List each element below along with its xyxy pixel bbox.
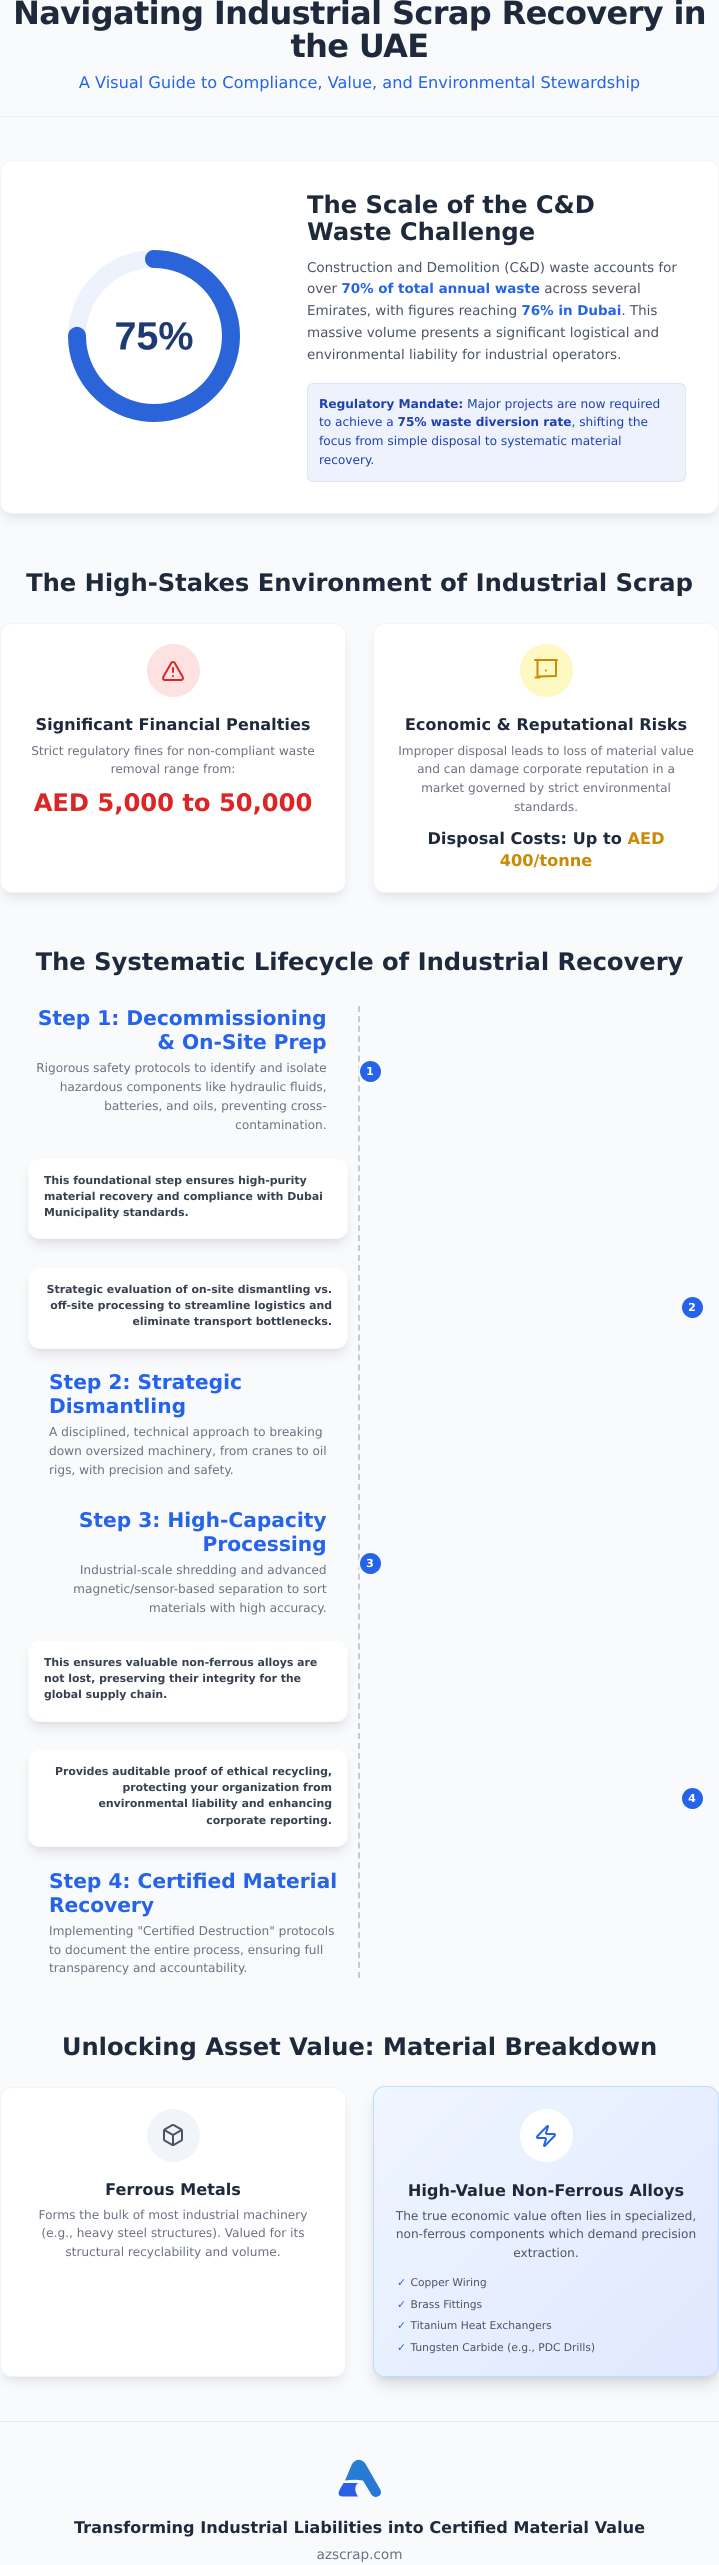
- step 1 text: & On-Site Prep: [157, 1030, 327, 1054]
- card text: extraction.: [513, 2246, 579, 2260]
- section heading: systematic lifecycle: The Systematic Lifecycle of Industrial Recovery: [36, 948, 683, 976]
- card text: market governed by strict environmental: [421, 781, 671, 795]
- step 4 note: [28, 1749, 348, 1847]
- card text: Improper disposal leads to loss of material value: [398, 744, 694, 758]
- card text: [396, 2208, 696, 2260]
- card text: and can damage corporate reputation in a: [417, 762, 675, 776]
- step 3 note: This ensures valuable non-ferrous alloys are: [44, 1656, 317, 1669]
- callout: regulatory mandate: focus from simple disposal to systematic material: [319, 434, 622, 448]
- step 4 text: [49, 1868, 337, 1975]
- step 2 note: off-site processing to streamline logistics and: [50, 1299, 332, 1312]
- panel body text: [307, 260, 677, 363]
- step 2 note: Strategic evaluation of on-site dismantling vs.: [47, 1283, 332, 1296]
- step 2 text: down oversized machinery, from cranes to oil: [49, 1444, 327, 1458]
- step 4 note: environmental liability and enhancing: [99, 1797, 332, 1810]
- card text: non-ferrous components which demand precision: [396, 2227, 696, 2241]
- title: [13, 0, 706, 65]
- panel body text: Emirates, with figures reaching 76% in Dubai. This: [307, 303, 657, 319]
- step 2 text: [49, 1370, 327, 1477]
- panel: ferrous metals: [0, 2087, 346, 2377]
- list of alloys: ✓: [397, 2276, 406, 2289]
- step 3 text: Industrial-scale shredding and advanced: [80, 1563, 327, 1577]
- step 4 note: protecting your organization from: [122, 1781, 332, 1794]
- step 3 note: [28, 1640, 348, 1722]
- step 4 badge: [682, 1788, 702, 1808]
- step 2 text: A disciplined, technical approach to breaking: [49, 1425, 323, 1439]
- list of alloys: Copper Wiring: [410, 2276, 487, 2289]
- step 3 text: Step 3: High-Capacity: [79, 1508, 327, 1532]
- card text: The true economic value often lies in specialized,: [396, 2208, 696, 2222]
- step 1 text: hazardous components like hydraulic fluids,: [60, 1080, 327, 1094]
- icon: lightning bolt: [520, 2109, 572, 2162]
- disposal cost figure: Disposal Costs: Up to AED: [427, 829, 665, 848]
- list of alloys: ✓: [397, 2298, 406, 2310]
- timeline: four-step lifecycle: [27, 1006, 703, 1978]
- step 1 badge: [360, 1060, 380, 1082]
- list of alloys: Brass Fittings: [410, 2298, 482, 2310]
- card text: structural recyclability and volume.: [65, 2245, 281, 2259]
- card text: standards.: [514, 800, 578, 814]
- panel body text: Construction and Demolition (C&D) waste accounts for: [307, 260, 677, 276]
- card heading: Economic & Reputational Risks: [405, 714, 687, 734]
- step 4 text: Recovery: [49, 1893, 154, 1917]
- step 1 text: contamination.: [235, 1118, 327, 1132]
- step 4 badge: 4: [688, 1792, 696, 1804]
- panel heading: Waste Challenge: [307, 218, 535, 246]
- icon: azscrap logo: [338, 2460, 381, 2497]
- panel: financial penalties: [0, 623, 346, 893]
- section heading: high-stakes environment: The High-Stakes Environment of Industrial Scrap: [26, 568, 693, 596]
- footer: [0, 2421, 719, 2560]
- step 3 note: not lost, preserving their integrity for the: [44, 1672, 301, 1685]
- step 3 note: global supply chain.: [44, 1688, 167, 1701]
- card text: removal range from:: [111, 762, 235, 776]
- icon: box: [146, 2108, 200, 2162]
- step 1 text: batteries, and oils, preventing cross-: [104, 1099, 327, 1113]
- panel body text: over 70% of total annual waste across several: [307, 281, 641, 297]
- step 4 note: Provides auditable proof of ethical recycling,: [55, 1765, 332, 1778]
- step 2 badge: 2: [688, 1301, 696, 1314]
- step 4 text: Implementing "Certified Destruction" protocols: [49, 1924, 334, 1938]
- card text: Forms the bulk of most industrial machinery: [39, 2208, 307, 2222]
- card heading: High-Value Non-Ferrous Alloys: [408, 2180, 684, 2200]
- donut chart: 75%: 75%: [114, 314, 194, 358]
- header: [0, 0, 719, 117]
- callout: regulatory mandate: to achieve a 75% waste diversion rate, shifting the: [319, 415, 648, 429]
- timeline axis: [358, 1006, 360, 1978]
- list of alloys: Titanium Heat Exchangers: [410, 2319, 552, 2332]
- card heading: Significant Financial Penalties: [35, 714, 311, 734]
- step 1 text: Step 1: Decommissioning: [38, 1006, 327, 1030]
- step 4 note: corporate reporting.: [206, 1814, 332, 1827]
- section heading: material breakdown: Unlocking Asset Value: Material Breakdown: [62, 2033, 657, 2061]
- step 3 text: materials with high accuracy.: [149, 1601, 327, 1615]
- step 3 text: [73, 1508, 327, 1615]
- list of alloys: [397, 2276, 595, 2354]
- list of alloys: ✓: [397, 2319, 406, 2332]
- website: azscrap.com: [317, 2547, 402, 2563]
- card text: (e.g., heavy steel structures). Valued for its: [41, 2226, 305, 2240]
- step 1 note: [28, 1158, 348, 1239]
- callout: regulatory mandate: Regulatory Mandate: Major projects are now required: [319, 396, 660, 410]
- step 2 text: rigs, with precision and safety.: [49, 1463, 234, 1477]
- step 2 text: Dismantling: [49, 1394, 186, 1418]
- panel: high-value non-ferrous alloys: [373, 2086, 719, 2377]
- step 2 note: [28, 1267, 348, 1349]
- step 4 text: to document the entire process, ensuring full: [49, 1942, 323, 1956]
- panel heading: The Scale of the C&D: [307, 191, 595, 219]
- panel: economic and reputational risks: [373, 623, 719, 893]
- list of alloys: Tungsten Carbide (e.g., PDC Drills): [410, 2340, 595, 2354]
- step 3 badge: 3: [366, 1556, 374, 1570]
- card text: Strict regulatory fines for non-compliant waste: [31, 744, 315, 758]
- icon: warning triangle: [146, 644, 200, 697]
- disposal cost figure: 400/tonne: [500, 851, 592, 870]
- step 1 text: Rigorous safety protocols to identify and isolate: [36, 1061, 327, 1075]
- step 4 text: Step 4: Certified Material: [49, 1868, 337, 1892]
- step 2 text: Step 2: Strategic: [49, 1370, 242, 1394]
- panel heading: [307, 191, 595, 246]
- subtitle: A Visual Guide to Compliance, Value, and Environmental Stewardship: [79, 73, 640, 92]
- card text: [31, 744, 315, 776]
- title: the UAE: [290, 27, 429, 65]
- callout: regulatory mandate: recovery.: [319, 453, 374, 467]
- step 2 badge: [682, 1297, 702, 1318]
- step 1 text: [36, 1006, 327, 1132]
- step 1 note: material recovery and compliance with Dubai: [44, 1190, 323, 1203]
- step 2 note: eliminate transport bottlenecks.: [132, 1315, 332, 1328]
- fine range figure: AED 5,000 to 50,000: [34, 789, 312, 817]
- step 3 badge: [360, 1552, 380, 1574]
- card text: [398, 744, 694, 814]
- disposal cost figure: [427, 829, 665, 870]
- step 3 text: magnetic/sensor-based separation to sort: [73, 1582, 327, 1596]
- callout: regulatory mandate: [307, 383, 686, 482]
- panel: scale of the C&D waste challenge: [0, 160, 719, 514]
- footer tagline: Transforming Industrial Liabilities into Certified Material Value: [74, 2518, 645, 2537]
- step 3 text: Processing: [203, 1532, 327, 1556]
- panel body text: massive volume presents a significant logistical and: [307, 325, 659, 341]
- step 1 badge: 1: [366, 1064, 374, 1078]
- step 4 text: transparency and accountability.: [49, 1961, 247, 1975]
- list of alloys: ✓: [397, 2340, 406, 2354]
- panel body text: environmental liability for industrial operators.: [307, 347, 621, 363]
- step 1 note: Municipality standards.: [44, 1206, 189, 1219]
- card text: [39, 2208, 307, 2259]
- icon: scroll: [520, 644, 572, 697]
- card heading: Ferrous Metals: [105, 2180, 241, 2199]
- step 1 note: This foundational step ensures high-purity: [44, 1174, 307, 1187]
- donut chart: 75%: [68, 250, 240, 422]
